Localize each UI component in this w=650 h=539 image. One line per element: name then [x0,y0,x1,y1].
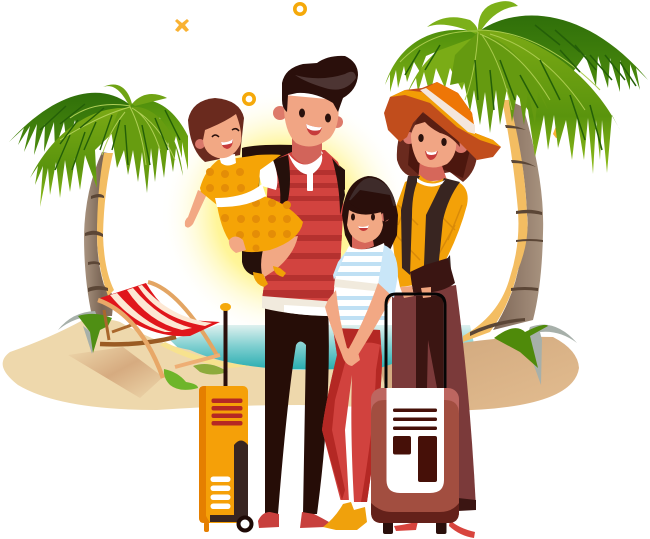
back legs and base [148,282,218,357]
belt [215,184,266,207]
ears [273,106,287,120]
panel lines and blocks [393,408,437,482]
front frame [98,300,163,378]
left bush [58,311,112,354]
right palm tree [385,1,648,342]
decorative sparkles [175,4,561,138]
hat [384,82,501,160]
white panel [386,388,444,493]
fronds [478,15,648,92]
toddler girl [185,98,303,287]
face [284,95,339,147]
shirt [331,243,392,322]
trousers [392,285,476,510]
sleeves [333,245,398,298]
red vents [212,398,242,426]
flip-flops [164,364,228,390]
beach: sand and sea [3,319,579,410]
white pills [210,476,230,509]
hair [397,110,477,182]
neck and collar [292,138,322,164]
trunk [84,152,114,316]
shirt [262,150,343,305]
right bush [494,325,577,385]
telescopic handle [224,308,228,386]
shoes [323,502,367,530]
wheels [383,520,393,534]
case body [199,386,248,523]
hair [342,176,398,250]
sweater [392,175,468,290]
hem [262,296,337,316]
face [380,212,390,222]
dark pocket [210,440,248,522]
ear and face [195,139,205,149]
arm [185,190,207,228]
father [242,56,358,528]
father's white sleeve [257,160,277,190]
arms and hands [325,290,360,366]
sun glow [160,90,410,340]
neck [418,160,447,182]
shoes [253,266,286,287]
collar [219,154,236,166]
hair [188,98,244,162]
ears and face [403,132,415,144]
foot [204,522,209,532]
hands [400,286,431,298]
neck [352,234,374,250]
trunk [493,100,543,330]
father's hand [229,236,246,253]
hair [282,56,358,112]
heels [394,520,475,538]
girl [322,176,398,530]
ankles [340,500,367,507]
case body [371,388,459,523]
shoes [258,512,329,528]
collar [417,178,445,187]
strap [273,155,345,215]
red trousers [322,328,382,502]
trousers [265,305,329,514]
legs [261,236,298,278]
striped fabric [100,283,220,336]
left palm tree [9,84,188,316]
fronds [9,93,130,155]
handle [386,294,445,388]
dress [200,154,303,252]
backpack [242,145,345,277]
beach chair [98,282,220,378]
yellow suitcase [199,303,252,532]
brown suitcase [371,294,459,534]
vest [401,176,460,290]
wheel [238,518,252,530]
mother [384,82,501,538]
